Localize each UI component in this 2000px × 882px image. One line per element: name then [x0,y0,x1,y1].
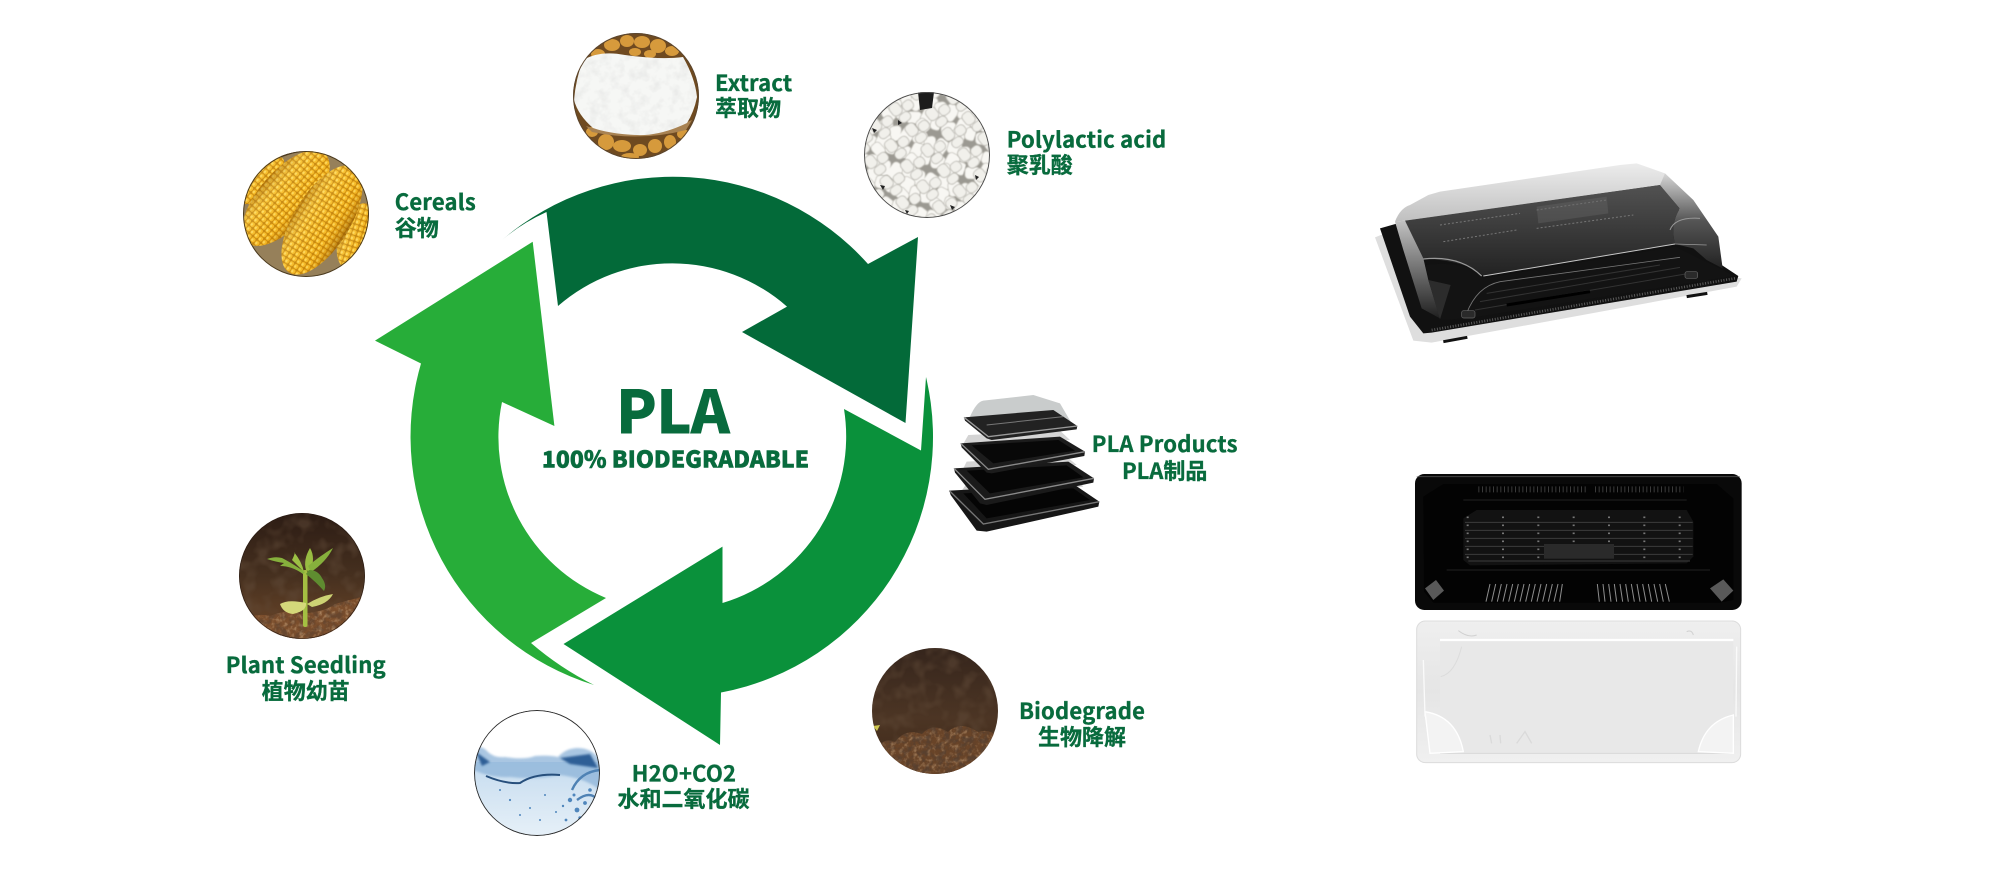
label: Biodegrade [1019,694,1145,752]
label: Polylactic acid [1007,122,1166,180]
label: H2O+CO2: H2O+CO2 [632,757,736,789]
label: PLA Products: PLA制品 [1122,454,1207,486]
recycling cycle: three arrows [375,177,933,745]
label: Plant Seedling: Plant Seedling [226,648,386,680]
arrow: dark green, top [502,177,918,423]
label: Plant Seedling [226,648,386,706]
label: Extract: 萃取物 [715,91,781,123]
arrow: mid green, right and bottom [564,377,933,745]
label: H2O+CO2 [617,757,750,814]
photo circle: flour extract [573,33,699,161]
photo circle: soil biodegrade [871,648,999,776]
label: Polylactic acid: 聚乳酸 [1007,148,1073,180]
product photo: closed tray with clear lid [1375,163,1742,343]
photo circle: water [474,710,600,836]
product photo: clear lid top view [1417,621,1741,763]
tray base [1380,185,1738,333]
lid window [1405,185,1680,276]
label: PLA Products: PLA Products [1092,427,1238,459]
label: Cereals [395,185,476,243]
tray 3 [954,457,1094,505]
label: PLA Products [1092,427,1238,486]
tray 1 with lid [964,395,1077,440]
label: Biodegrade: 生物降解 [1038,720,1126,752]
tray 4 (bottom) [949,478,1099,532]
lid top band [1395,163,1680,222]
product photo: open black tray base [1415,474,1742,610]
label: Plant Seedling: 植物幼苗 [262,674,350,706]
label: Polylactic acid: Polylactic acid [1007,122,1166,154]
photo thumbnail: stacked PLA trays [949,395,1099,532]
center title: PLA: PLA [616,364,731,452]
photo circle: polylactic acid pellets [864,92,990,218]
label: Cereals: 谷物 [395,211,439,243]
label: Extract [715,66,792,123]
lid left face [1395,221,1440,318]
center subtitle: 100% BIODEGRADABLE: 100% BIODEGRADABLE [542,440,809,474]
lid right face [1660,173,1723,268]
label: Biodegrade: Biodegrade [1019,694,1145,726]
photo circle: corn cereals [243,151,369,277]
label: Cereals: Cereals [395,185,476,217]
lid rim [1375,230,1742,343]
arrow: light green, left [375,242,606,685]
label: Extract: Extract [715,66,792,98]
tray 2 [961,431,1085,473]
label: H2O+CO2: 水和二氧化碳 [617,782,750,814]
photo circle: plant seedling [239,513,365,640]
tray front interior [1425,247,1733,320]
